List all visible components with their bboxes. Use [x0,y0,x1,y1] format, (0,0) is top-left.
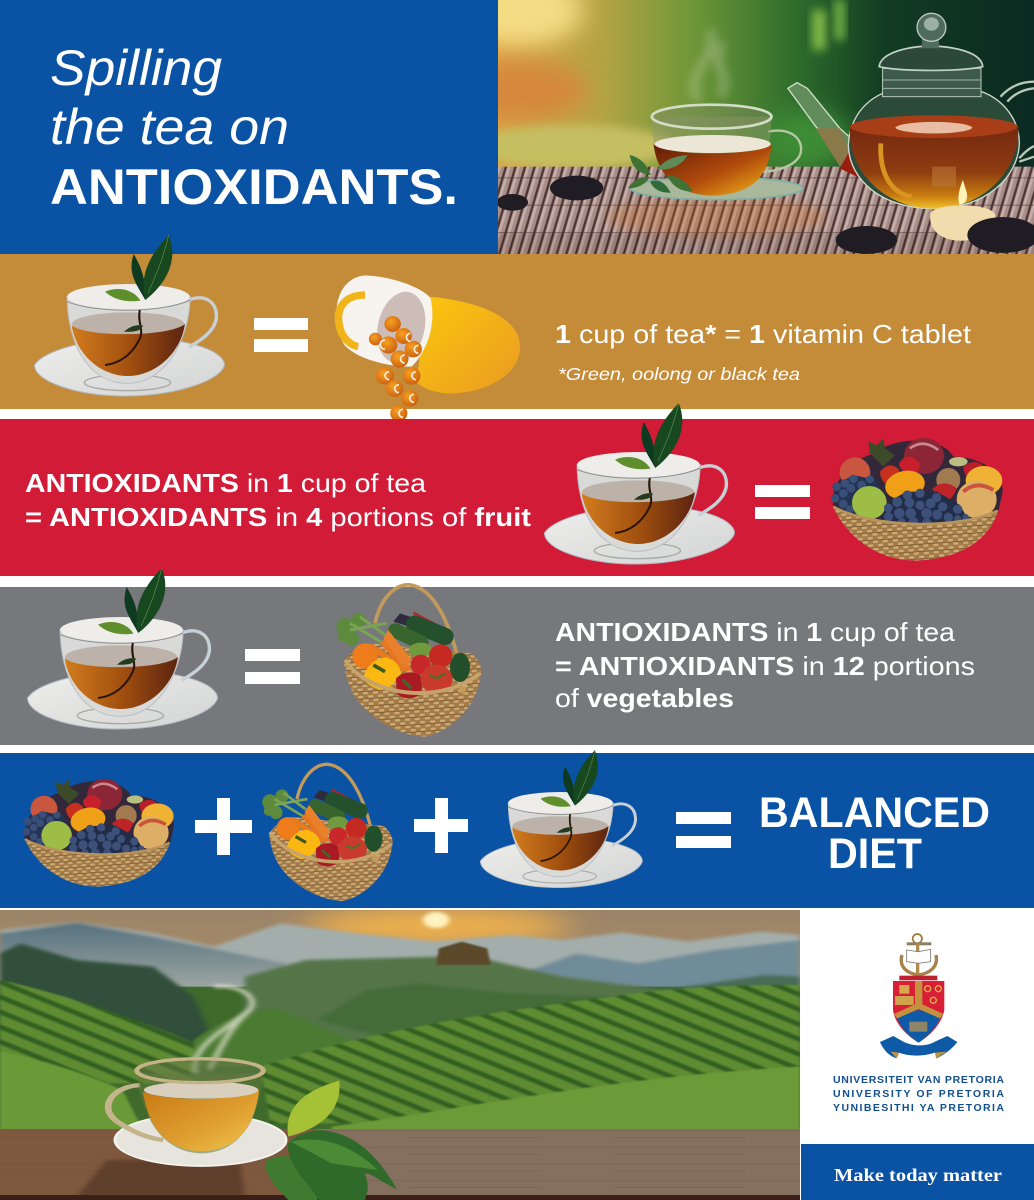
icon: equals sign [676,812,731,848]
panel: university logo [801,910,1034,1144]
heading: spilling the tea on antioxidants: the tea on [50,99,289,155]
icon: cup of tea [27,568,218,729]
icon: equals sign [755,485,810,519]
heading: spilling the tea on antioxidants: Spilling [50,40,222,96]
text: university name in three languages [833,1074,1004,1114]
panel: hero photo of teapot and cup [454,0,1034,254]
teapot [788,13,1034,209]
icon: vitamin C capsule [336,275,520,422]
text: university name in three languages: YUNIBESITHI YA PRETORIA [833,1102,1004,1114]
panel: balanced diet band [0,750,1034,908]
text: antioxidants compared to vegetables: ANTIOXIDANTS in 1 cup of tea [555,617,956,647]
text: university name in three languages: UNIVERSITY OF PRETORIA [833,1088,1004,1100]
panel: tea plantation photo [0,907,800,1200]
text: antioxidants compared to vegetables: = ANTIOXIDANTS in 12 portions [555,651,975,681]
icon: fruit basket [23,779,174,887]
stones [497,176,1034,254]
icon: equals sign [245,649,300,684]
text: tea types footnote: *Green, oolong or black tea [558,364,800,384]
icon: plus sign [414,798,468,853]
tea cup with steam [108,986,286,1166]
text: antioxidants compared to fruit [25,468,531,532]
icon: cup of tea [34,235,225,396]
tea cup [628,105,803,200]
panel: vegetables band [0,568,1034,745]
text: one cup equals one vitamin C tablet: 1 cup of tea * = 1 vitamin C tablet [555,319,972,349]
icon: fruit basket [831,438,1003,561]
icon: cup of tea [544,403,735,564]
panel: tagline [801,1144,1034,1200]
panel: title [0,0,498,254]
bamboo mat [498,167,1034,254]
icon: plus sign [195,798,252,855]
text: balanced diet: BALANCED [759,789,990,837]
panel: fruit band [0,403,1034,576]
text: balanced diet: DIET [828,830,922,878]
text: make today matter: Make today matter [834,1165,1002,1185]
text: antioxidants compared to fruit: ANTIOXIDANTS in 1 cup of tea [25,468,427,498]
text: antioxidants compared to vegetables [555,617,975,713]
text: antioxidants compared to vegetables: of vegetables [555,683,734,713]
logo: University of Pretoria crest [880,934,957,1058]
icon: cup of tea [480,750,642,888]
candle [930,180,995,241]
text: university name in three languages: UNIVERSITEIT VAN PRETORIA [833,1074,1004,1086]
icon: equals sign [254,318,308,352]
text: antioxidants compared to fruit: = ANTIOXIDANTS in 4 portions of fruit [25,502,531,532]
panel: vitamin C band [0,235,1034,422]
heading: spilling the tea on antioxidants [50,40,458,215]
icon: vegetable basket [262,764,393,901]
tea leaves [265,1081,397,1200]
text: balanced diet [759,789,990,878]
icon: vegetable basket [336,585,481,737]
heading: spilling the tea on antioxidants: ANTIOXIDANTS. [50,159,458,215]
